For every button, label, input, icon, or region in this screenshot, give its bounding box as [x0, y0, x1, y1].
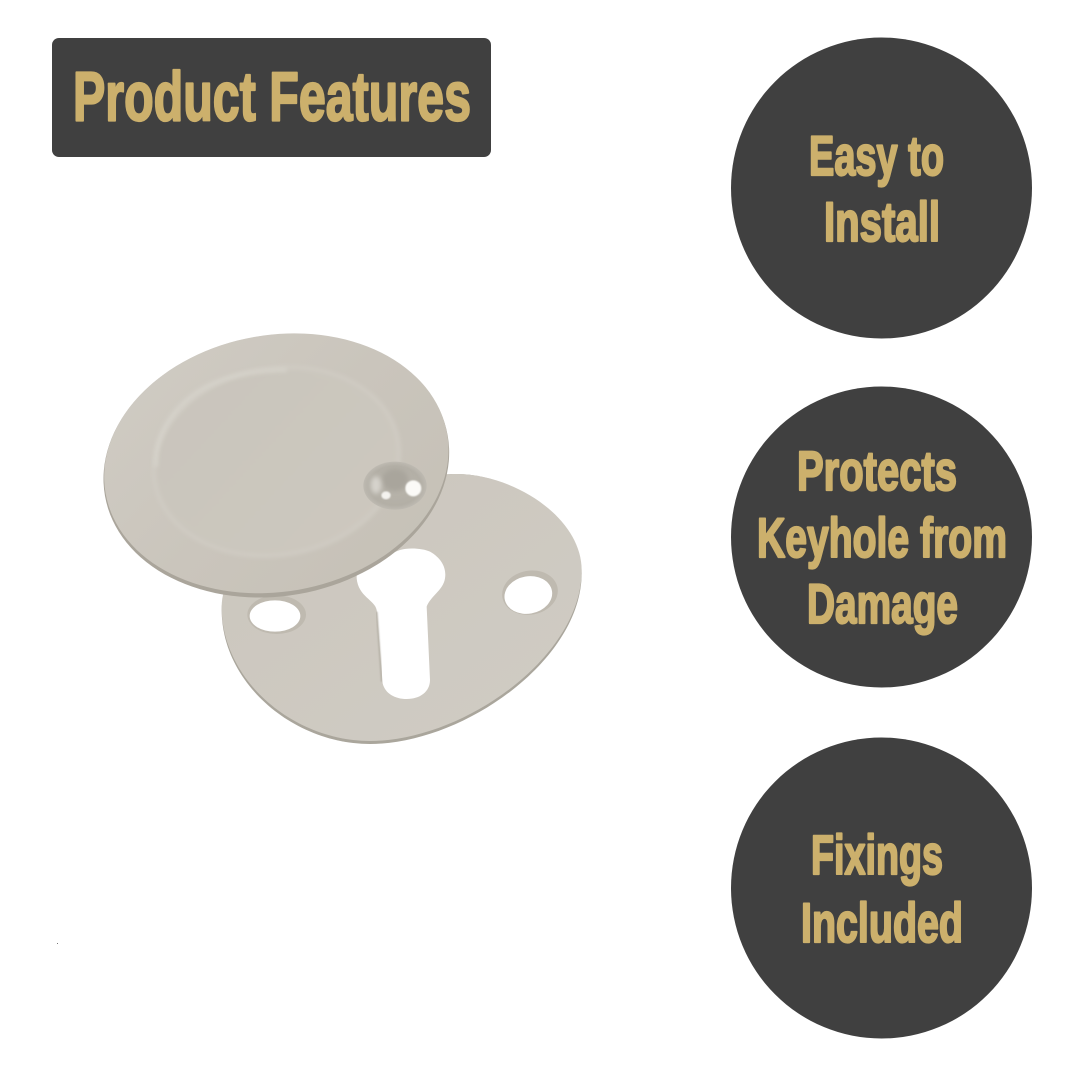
- feature badge: protects keyhole: [731, 386, 1032, 688]
- cover rivet: [363, 462, 427, 510]
- feature badge: fixings included: Included: [801, 891, 963, 954]
- keyhole opening: [357, 548, 445, 699]
- feature badge: protects keyhole: Protects: [797, 439, 957, 502]
- feature badge: easy to install: Install: [824, 190, 940, 253]
- swinging cover: [82, 307, 470, 624]
- feature badge: fixings included: [731, 738, 1032, 1038]
- tiny speck: [57, 943, 58, 944]
- back plate: [222, 474, 582, 744]
- feature badge: easy to install: [731, 38, 1032, 338]
- right screw hole: [499, 566, 561, 619]
- title banner: [52, 38, 491, 157]
- title text: Product Features: [73, 58, 471, 136]
- cover recessed dish: [139, 348, 414, 575]
- feature badge: fixings included: Fixings: [811, 823, 943, 886]
- left screw hole: [247, 595, 306, 634]
- product photo: keyhole escutcheon with cover: [82, 307, 582, 744]
- feature badge: easy to install: Easy to: [809, 124, 944, 187]
- feature badge: protects keyhole: Damage: [807, 572, 958, 635]
